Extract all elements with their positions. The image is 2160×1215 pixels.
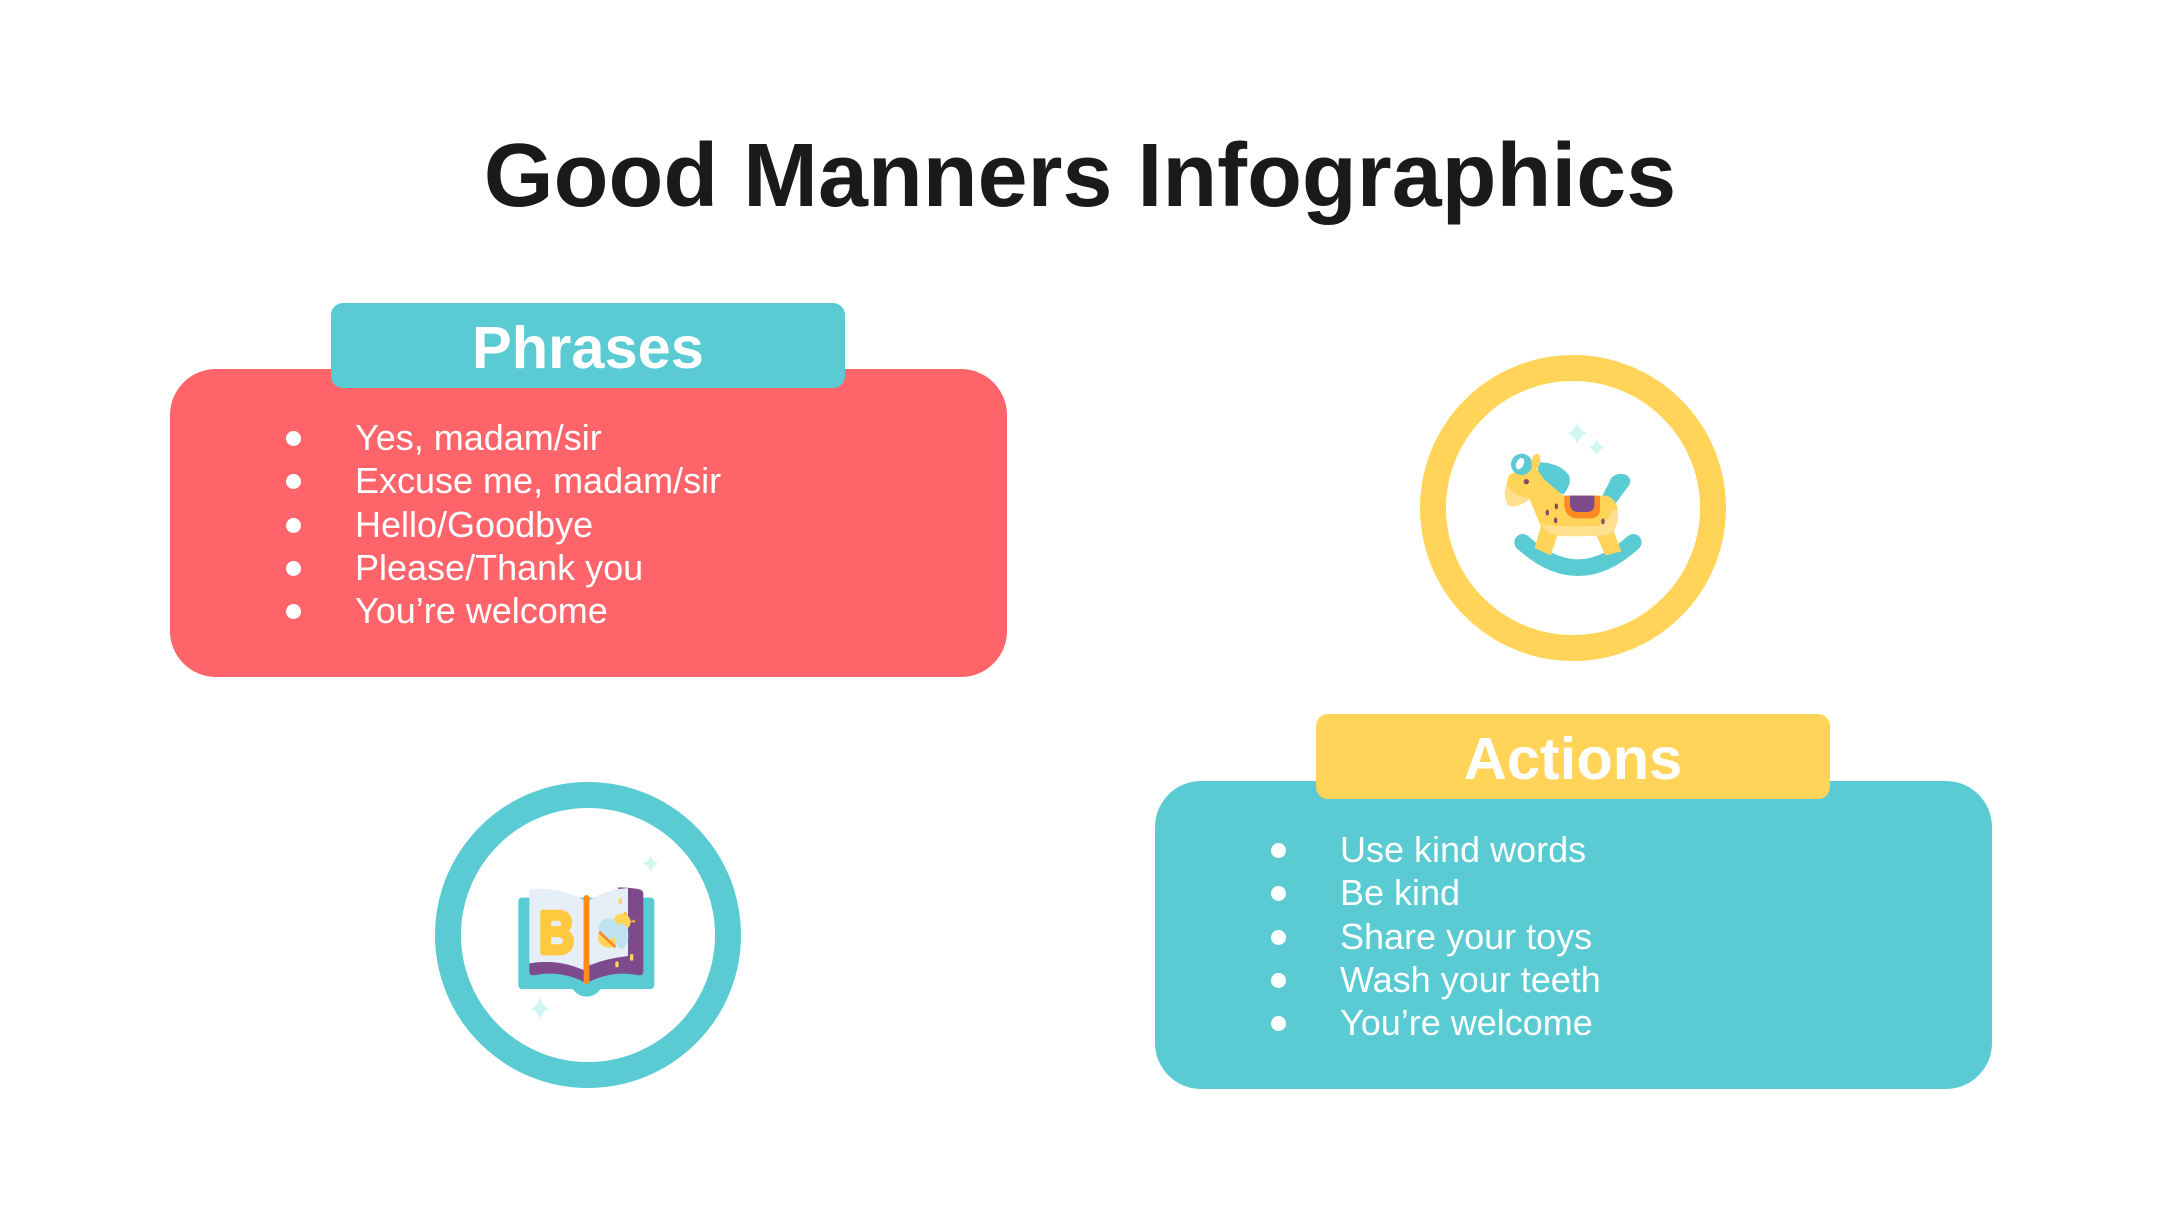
actions list: Be kind (1340, 872, 1460, 913)
phrases list (286, 417, 721, 631)
heading: phrases: Phrases (472, 314, 704, 381)
heading: actions: Actions (1464, 725, 1682, 792)
actions list: Share your toys (1340, 916, 1592, 957)
phrases list: You’re welcome (355, 590, 608, 631)
ring: yellow circle (1420, 355, 1726, 661)
actions list: Use kind words (1340, 829, 1586, 870)
actions list (1271, 829, 1601, 1043)
phrases list: Excuse me, madam/sir (355, 460, 721, 501)
phrases list: Hello/Goodbye (355, 504, 593, 545)
ring: teal circle (435, 782, 741, 1088)
panel: phrases (170, 369, 1007, 677)
phrases list: Yes, madam/sir (355, 417, 602, 458)
icon: open book: B (539, 900, 574, 966)
panel: actions (1155, 781, 1992, 1089)
phrases list: Please/Thank you (355, 547, 643, 588)
heading: phrases (331, 303, 845, 388)
actions list: Wash your teeth (1340, 959, 1601, 1000)
icon: open book (518, 855, 658, 1021)
heading: actions (1316, 714, 1830, 799)
actions list: You’re welcome (1340, 1002, 1593, 1043)
title: Good Manners Infographics (484, 126, 1676, 226)
icon: rocking horse (1505, 422, 1633, 568)
